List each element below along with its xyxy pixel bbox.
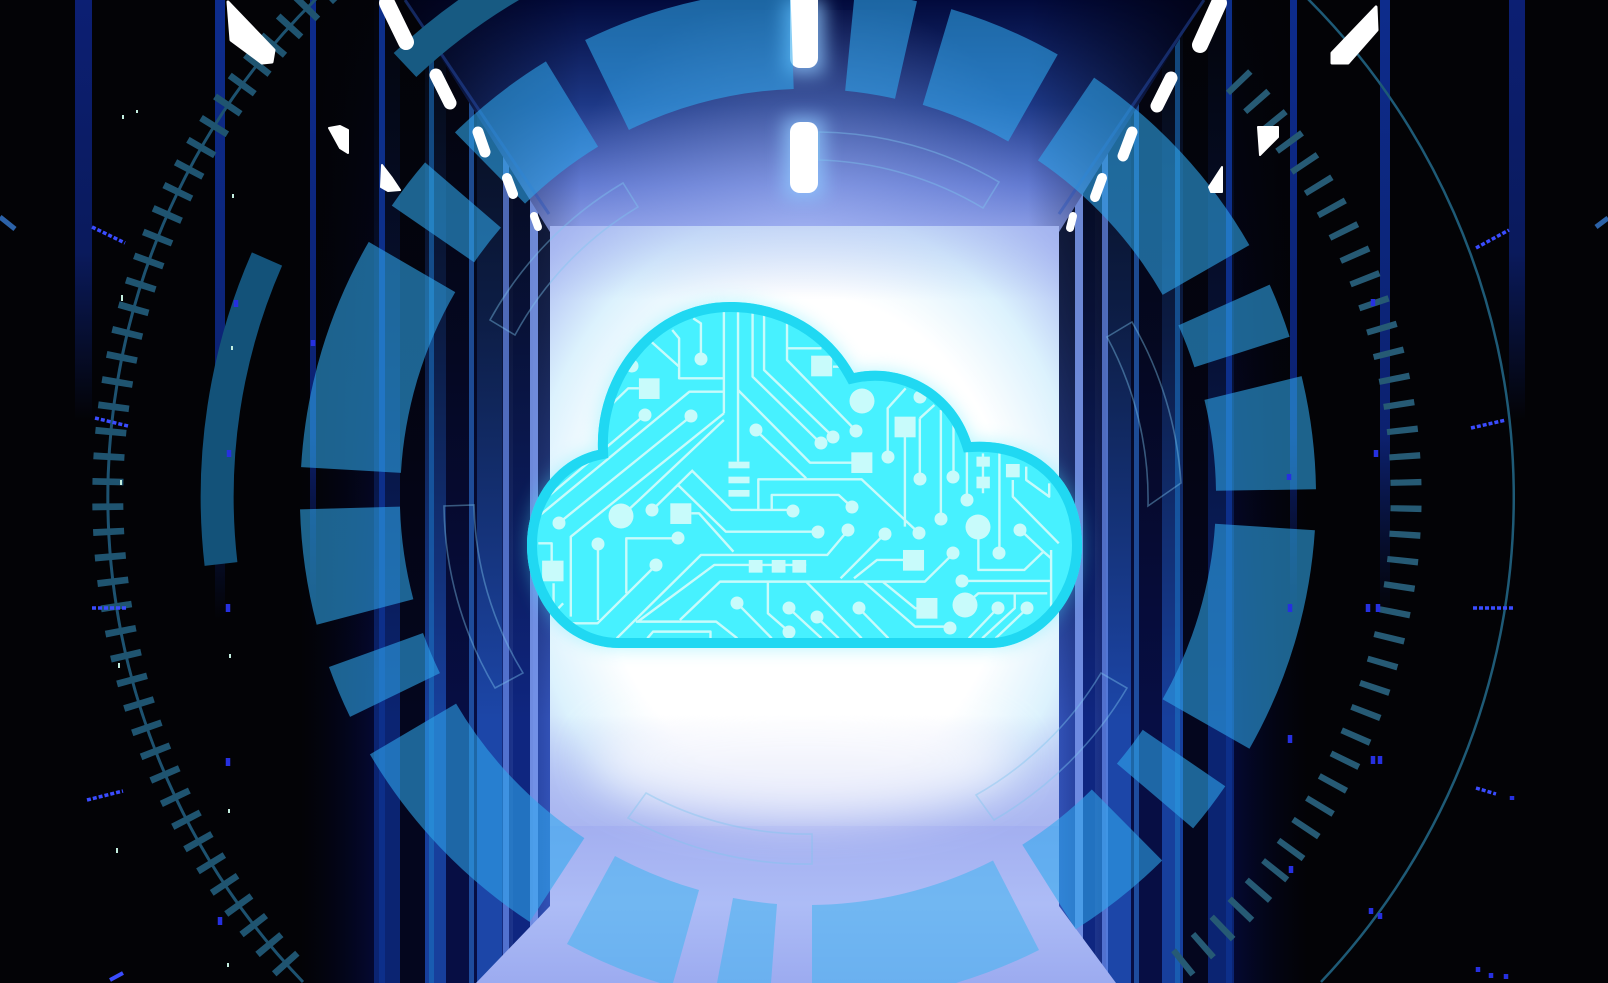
back wall glow	[550, 226, 1059, 830]
ceiling lamps: left row	[228, 2, 538, 227]
circuit traces	[538, 312, 1059, 638]
server status lights: left	[0, 110, 313, 980]
ceiling lamps: centre	[784, 0, 824, 198]
server racks: left	[75, 0, 552, 983]
server racks: right	[1056, 0, 1525, 983]
tick ring: left	[108, 0, 336, 982]
outlined inner ring segments	[444, 132, 1181, 864]
main ring segments	[350, 39, 1266, 983]
floor	[476, 700, 1116, 983]
cloud glow	[527, 302, 1082, 648]
outer ring segments	[217, 0, 512, 564]
server status lights: right	[1289, 218, 1608, 979]
thin arc: right	[1307, 0, 1514, 982]
cloud border	[527, 302, 1082, 648]
cloud fill	[527, 302, 1082, 648]
ceiling	[405, 0, 1204, 232]
ceiling lamps: right row	[1070, 3, 1377, 228]
cloud icon with circuit pattern	[527, 302, 1082, 648]
tick ring: right	[1180, 80, 1406, 965]
